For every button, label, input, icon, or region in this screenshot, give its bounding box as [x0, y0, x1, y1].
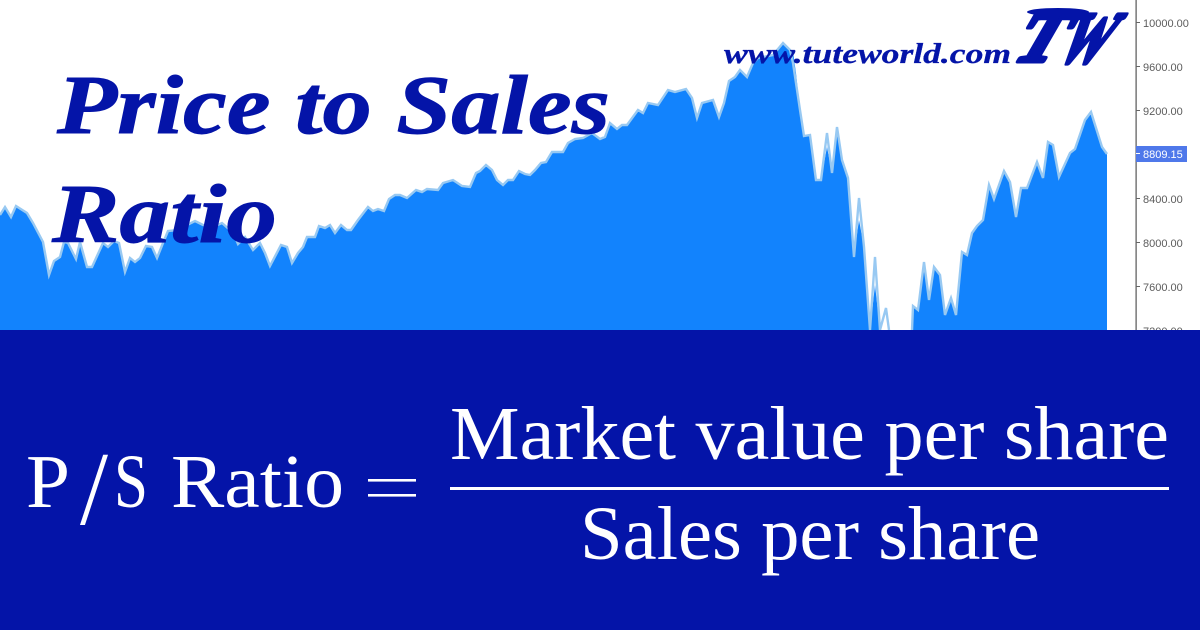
- title: [51, 59, 610, 261]
- price axis: [1136, 0, 1189, 338]
- fraction bar: [450, 487, 1169, 490]
- price axis: 7200.00: [1143, 326, 1183, 338]
- chart line: [0, 43, 889, 330]
- price axis: 8000.00: [1143, 238, 1183, 250]
- current price tag: [1136, 146, 1187, 162]
- formula: left side: P: [26, 440, 70, 524]
- current price tag: 8809.15: [1143, 149, 1183, 161]
- logo: TW: W: [1045, 0, 1137, 78]
- denominator: Sales per share: [580, 492, 1040, 576]
- formula: left side: Ratio: [171, 440, 344, 524]
- numerator: Market value per share: [450, 392, 1169, 476]
- price axis: 10000.00: [1143, 18, 1189, 30]
- equals sign: [368, 479, 416, 497]
- formula: left side: [26, 430, 344, 547]
- formula: left side: /: [80, 430, 109, 547]
- area chart: market index: [0, 43, 1107, 330]
- title: Ratio: [51, 168, 277, 261]
- price axis: 9200.00: [1143, 106, 1183, 118]
- price axis: 8400.00: [1143, 194, 1183, 206]
- website url: www.tuteworld.com: [724, 39, 1011, 70]
- logo: TW: [999, 0, 1137, 78]
- price axis: 9600.00: [1143, 62, 1183, 74]
- formula: left side: S: [114, 440, 148, 524]
- price axis: 7600.00: [1143, 282, 1183, 294]
- title: Price to Sales: [56, 59, 610, 152]
- formula panel: [0, 330, 1200, 630]
